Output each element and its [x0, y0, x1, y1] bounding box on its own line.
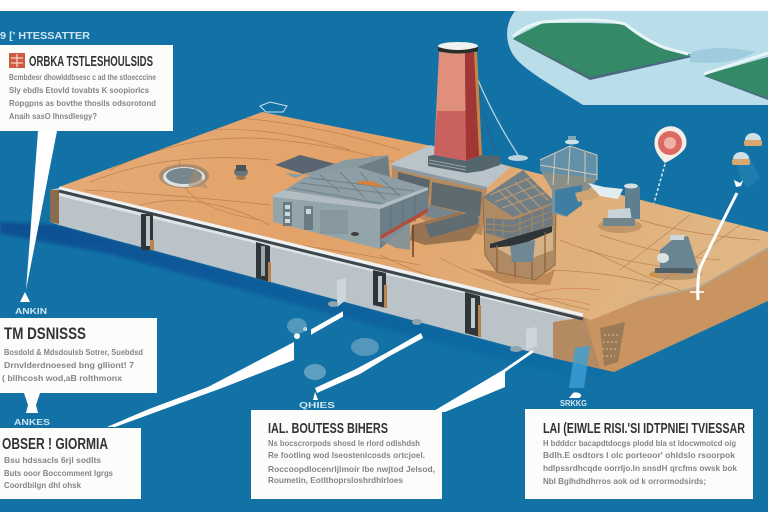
panel: second left: TM DSNISSS [4, 324, 86, 343]
panel: top-left: Ropgpns as bovthe thosils odsorotond [9, 98, 156, 108]
island inset map [507, 11, 768, 105]
panel: centre bottom: Roumetin, Eotlthoprsloshrdhlrloes [268, 475, 403, 485]
right equipment B [649, 235, 702, 280]
label: ANKES with pointer: ANKES [14, 418, 51, 427]
main grey building [273, 155, 428, 250]
right equipment A [598, 184, 642, 233]
right callout arrow [690, 180, 743, 300]
panel: third left: Coordbilgn dhl ohsk [4, 480, 81, 490]
pointer: panel 3 [107, 313, 342, 427]
label: SRKKG [560, 392, 587, 408]
panel: right bottom: H bdddcr bacapdtdocgs plodd bla st ldocwmotcd oig [543, 438, 736, 448]
platform: wooden deck [59, 112, 768, 320]
glass dome unit [540, 136, 600, 217]
pointer: panel 4 right [432, 350, 534, 412]
top panel pointer [26, 131, 57, 290]
label: QHIES: QHIES [299, 401, 336, 410]
panel: right bottom: Bdlh.E osdtors l olc porteoor' ohldslo rsoorpok [543, 450, 735, 460]
white wing canopy [588, 183, 623, 199]
panel: centre bottom: Re footling wod Iseostenlcosds ortcjoel. [268, 450, 425, 460]
panel: top-left: Anaih sasO lhnsdlesgy? [9, 111, 97, 121]
panel: second left: Bosdold & Mdsdoulsb Sotrer, Suebdsd [4, 347, 143, 357]
platform: hull wall [50, 188, 583, 358]
panel: third left: Buts ooor Boccomment lgrgs [4, 468, 113, 478]
deck rail [59, 188, 583, 315]
panel: centre bottom: Ns bocscrorpods shosd le rlord odlshdsh [268, 438, 420, 448]
panel: right bottom [525, 409, 753, 499]
platform: timber end block [553, 248, 768, 388]
timber workshop [410, 210, 480, 257]
panel: right bottom: Nbl Bglhdhdhrros aok od k orrormodsirds; [543, 476, 706, 486]
panel: top-left: Bcmbdesr dhowlddbsesc c ad the stloecccine [9, 72, 156, 82]
panel: centre bottom: Roccoopdlocenrljlmoir lbe nwjtod Jelsod, [268, 464, 435, 474]
water shadow along hull [0, 222, 612, 384]
icon: red emblem [9, 53, 25, 68]
small outline marker behind deck [260, 102, 287, 112]
slab and lower timber frame [392, 145, 510, 235]
label: SRKKG: SRKKG [560, 399, 587, 408]
chimney tower [428, 42, 528, 173]
panel: third left: Bsu hdssacls 6rjl sodlts [4, 455, 101, 465]
panel: second left: ( bllhcosh wod,aB rolthmonx [2, 373, 122, 383]
panel: top-left: Sly ebdls Etovld tovabts K soopiorlcs [9, 85, 149, 95]
small deck machine [234, 165, 248, 180]
header strip label: 9 [' HTESSATTER [0, 31, 91, 42]
glass machinery hall [470, 170, 556, 285]
floating markers [732, 133, 762, 188]
panel: third left: OBSER ! GIORMIA [2, 436, 108, 453]
panel: centre bottom [251, 410, 442, 499]
panel: third left [0, 428, 141, 499]
deck hatch [159, 164, 209, 188]
label: ANKES with pointer [14, 393, 51, 427]
label: ANKIN [15, 292, 47, 316]
label: ANKIN: ANKIN [15, 307, 47, 316]
panel: top-left: ORBKA TSTLESHOULSIDS [29, 53, 153, 70]
panel: top-left [0, 45, 173, 131]
panel: second left: Drnvlderdnoesed bng glliont! 7 [4, 360, 134, 370]
panel: right bottom: hdlpssrdhcqde oorrljo.ln snsdH qrcfms owsk bok [543, 463, 737, 473]
hull doors [141, 214, 481, 337]
panel: second left [0, 318, 157, 393]
pointer: panel 4 middle [304, 333, 423, 400]
hull fins [328, 278, 537, 352]
panel: centre bottom: IAL. BOUTESS BIHERS [268, 420, 388, 437]
rear machinery patch [275, 155, 340, 174]
location pin [654, 126, 686, 203]
